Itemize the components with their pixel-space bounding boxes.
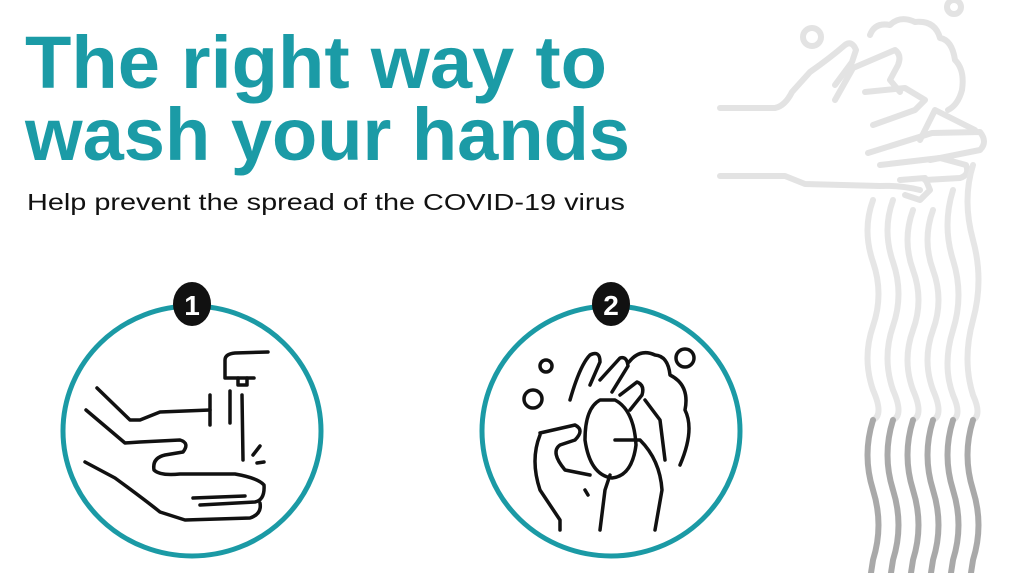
icon: hands lathering soap xyxy=(524,349,694,530)
subtitle: Help prevent the spread of the COVID-19 virus xyxy=(27,189,625,215)
step 2 badge xyxy=(592,282,630,326)
title: wash your hands xyxy=(24,93,630,176)
step 1 panel xyxy=(63,282,321,556)
step 1 badge xyxy=(173,282,211,326)
step 1 badge: 1 xyxy=(184,290,200,321)
title: The right way to xyxy=(25,21,607,104)
step 2 panel xyxy=(482,282,740,556)
title xyxy=(24,21,630,176)
icon: hands under tap xyxy=(85,352,268,520)
decorative water waves xyxy=(868,165,978,573)
decorative background hand with soap xyxy=(720,0,984,200)
step 2 badge: 2 xyxy=(603,290,619,321)
